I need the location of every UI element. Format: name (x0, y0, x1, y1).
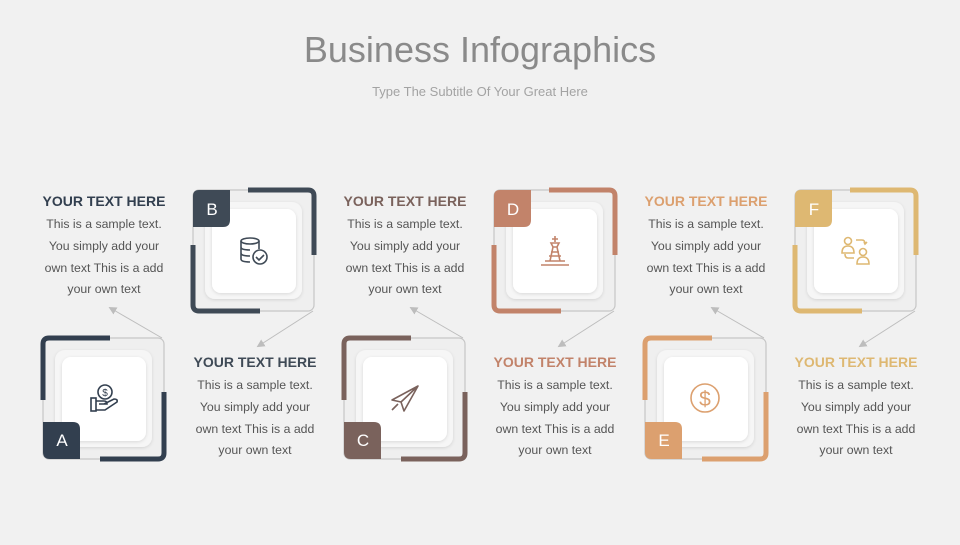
box E (645, 338, 766, 459)
text F: own text This is a add (797, 422, 916, 436)
text A: your own text (67, 282, 141, 296)
badge C: C (357, 431, 369, 450)
box D (494, 190, 615, 311)
text C: You simply add your (350, 239, 460, 253)
icon: paper plane (392, 386, 418, 411)
arrow D (561, 311, 614, 345)
text C: YOUR TEXT HERE (344, 193, 466, 209)
icon: hand with coin: $ (102, 388, 108, 399)
text B: your own text (218, 443, 292, 457)
badge F: F (809, 200, 819, 219)
text E: your own text (669, 282, 743, 296)
text A: This is a sample text. (46, 217, 162, 231)
arrow B (260, 311, 313, 345)
arrow E (714, 309, 764, 338)
text B (194, 354, 316, 457)
badge E: E (658, 431, 670, 450)
subtitle: Type The Subtitle Of Your Great Here (372, 84, 588, 99)
title: Business Infographics (304, 29, 656, 70)
badge D: D (507, 200, 519, 219)
text D: your own text (518, 443, 592, 457)
arrow F (862, 311, 915, 345)
icon: people exchange (842, 238, 869, 264)
arrow C (413, 309, 463, 338)
box B (193, 190, 314, 311)
text A: own text This is a add (45, 261, 164, 275)
text E (645, 193, 767, 296)
arrow A (112, 309, 162, 338)
icon: dollar coin: $ (699, 388, 711, 411)
box F (795, 190, 916, 311)
text A: You simply add your (49, 239, 159, 253)
icon: database check (241, 238, 267, 264)
text F: You simply add your (801, 400, 911, 414)
text B: own text This is a add (196, 422, 315, 436)
text E: YOUR TEXT HERE (645, 193, 767, 209)
text D: own text This is a add (496, 422, 615, 436)
badge B: B (206, 200, 218, 219)
icon: chess king (541, 236, 569, 265)
box A (43, 338, 164, 459)
text E: own text This is a add (647, 261, 766, 275)
text F (795, 354, 917, 457)
text E: You simply add your (651, 239, 761, 253)
text A (43, 193, 165, 296)
text F: This is a sample text. (798, 378, 914, 392)
box C (344, 338, 465, 459)
text C (344, 193, 466, 296)
text B: This is a sample text. (197, 378, 313, 392)
text E: This is a sample text. (648, 217, 764, 231)
text F: YOUR TEXT HERE (795, 354, 917, 370)
text F: your own text (819, 443, 893, 457)
text C: This is a sample text. (347, 217, 463, 231)
text C: your own text (368, 282, 442, 296)
badge A: A (56, 431, 68, 450)
text A: YOUR TEXT HERE (43, 193, 165, 209)
text D: This is a sample text. (497, 378, 613, 392)
text B: YOUR TEXT HERE (194, 354, 316, 370)
text D: You simply add your (500, 400, 610, 414)
text D: YOUR TEXT HERE (494, 354, 616, 370)
text D (494, 354, 616, 457)
text B: You simply add your (200, 400, 310, 414)
text C: own text This is a add (346, 261, 465, 275)
